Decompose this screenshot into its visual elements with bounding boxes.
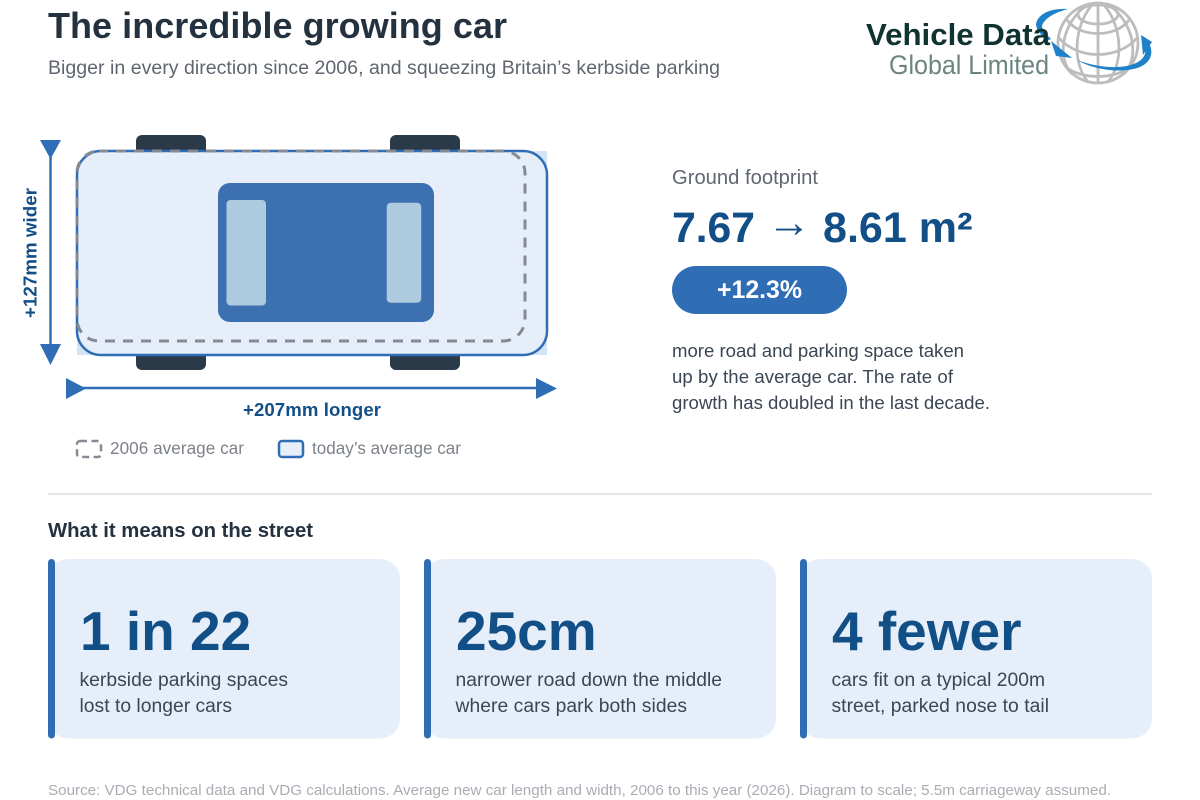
footprint description — [672, 340, 990, 413]
logo wordmark: Vehicle Data — [866, 17, 1051, 52]
2006 average car outline — [77, 151, 525, 341]
today's average car outline — [77, 151, 547, 355]
corner tint behind today's car — [77, 151, 547, 355]
footprint figures: ² — [957, 202, 973, 256]
label: length increase: +207mm longer — [243, 399, 381, 420]
panel: fewer cars — [800, 559, 1152, 738]
panel: fewer cars: cars fit on a typical 200m — [832, 670, 1045, 691]
panel: road width: 25cm — [456, 600, 597, 662]
arrow: length — [66, 378, 557, 399]
badge: percent increase — [672, 266, 847, 314]
panel: parking spaces: lost to longer cars — [80, 696, 232, 717]
icon: globe — [1058, 3, 1138, 83]
footprint figures: 8.61 m — [823, 204, 957, 252]
panel: road width: where cars park both sides — [454, 696, 687, 717]
panel: road width — [424, 559, 776, 738]
title: The incredible growing car — [48, 5, 507, 46]
logo wordmark: Global Limited — [889, 50, 1049, 80]
legend: today: today’s average car — [312, 439, 461, 458]
footprint figures: → — [767, 198, 811, 247]
car diagram — [77, 135, 547, 370]
label: width increase: +127mm wider — [20, 188, 40, 318]
panel: fewer cars: street, parked nose to tail — [832, 696, 1049, 717]
legend: 2006: 2006 average car — [110, 439, 244, 458]
footprint figures — [672, 198, 973, 256]
footprint figures: 7.67 — [672, 204, 755, 252]
windscreen — [387, 203, 421, 303]
subtitle: Bigger in every direction since 2006, and squeezing Britain’s kerbside parking — [48, 57, 720, 79]
panel: fewer cars: 4 fewer — [832, 600, 1022, 662]
rear window — [226, 200, 266, 306]
footprint heading: Ground footprint — [672, 167, 818, 189]
panel: ground footprint — [672, 167, 990, 413]
icon: blue orbit arrows — [1036, 9, 1152, 71]
panel: parking spaces — [48, 559, 400, 738]
badge: percent increase: +12.3% — [717, 276, 802, 304]
source note: Source: VDG technical data and VDG calculations. Average new car length and width, 2006 to this year (2026). Diagram to scale; 5.5m carriageway assumed. — [48, 782, 1111, 799]
footprint description: more road and parking space taken — [672, 340, 964, 361]
panel: parking spaces: 1 in 22 — [80, 600, 251, 662]
section heading: What it means on the street — [48, 520, 313, 542]
car cabin — [218, 183, 434, 322]
logo: Vehicle Data Global Limited — [866, 3, 1152, 83]
panel: parking spaces: kerbside parking spaces — [80, 670, 288, 691]
footprint description: up by the average car. The rate of — [672, 366, 954, 387]
panel: road width: narrower road down the middle — [456, 670, 722, 691]
arrow: width — [40, 140, 61, 365]
legend — [77, 439, 461, 458]
footprint description: growth has doubled in the last decade. — [672, 392, 990, 413]
wheels — [136, 135, 460, 370]
logo wordmark — [866, 17, 1051, 80]
